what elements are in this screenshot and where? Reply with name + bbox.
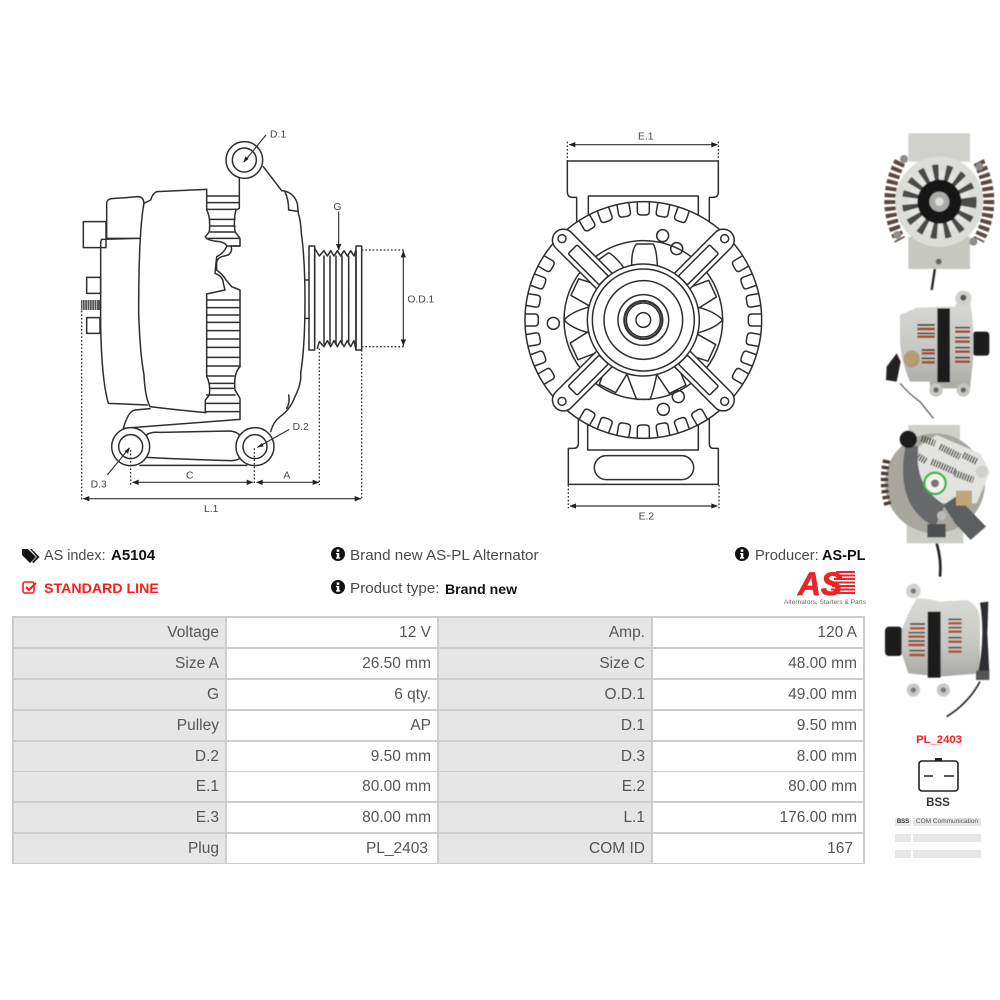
info row: producer: AS-PL (822, 548, 866, 564)
row: Plug / COM ID (14, 834, 863, 863)
icon: info (331, 580, 345, 594)
pin row: BSS: BSS (897, 819, 909, 825)
row: E.1 / E.2: E.2 (622, 778, 645, 795)
row: Pulley / D.1: Pulley (177, 717, 219, 734)
row: Plug / COM ID: PL_2403 (366, 840, 428, 857)
connector label BSS: BSS (926, 797, 950, 809)
row: E.3 / L.1 (14, 803, 863, 832)
info row: product type (331, 580, 518, 597)
side view technical drawing: D.3 (91, 479, 107, 490)
row: Size A / Size C: Size A (175, 655, 219, 672)
info row: AS index: A5104 (111, 547, 155, 564)
row: Pulley / D.1: 9.50 mm (797, 717, 857, 734)
icon: info (331, 547, 345, 561)
row: E.3 / L.1: L.1 (623, 809, 645, 826)
icon: checked box (22, 581, 37, 594)
row: Plug / COM ID: Plug (188, 840, 219, 857)
row: G / O.D.1: 6 qty. (394, 686, 431, 703)
row: G / O.D.1: O.D.1 (605, 686, 645, 703)
row: Pulley / D.1: D.1 (621, 717, 645, 734)
side view technical drawing: G (333, 202, 341, 213)
row: E.1 / E.2 (14, 772, 863, 801)
row: D.2 / D.3: D.2 (195, 748, 219, 765)
row: D.2 / D.3 (14, 742, 863, 771)
row: Voltage / Amp: 12 V (399, 624, 431, 641)
front view technical drawing: E.2 (639, 511, 654, 522)
row: Plug / COM ID: 167 (827, 840, 853, 857)
row: E.3 / L.1: 80.00 mm (362, 809, 431, 826)
specification table (12, 616, 865, 864)
pin table (895, 818, 981, 858)
row: E.3 / L.1: E.3 (196, 809, 219, 826)
pin row: empty (895, 850, 981, 858)
icon: info (735, 547, 749, 561)
row: D.2 / D.3: 8.00 mm (797, 748, 857, 765)
row: G / O.D.1: 49.00 mm (788, 686, 857, 703)
row: Size A / Size C: 26.50 mm (362, 655, 431, 672)
info row: product type: Product type: (350, 580, 440, 597)
row: Pulley / D.1 (14, 711, 863, 740)
row: Size A / Size C: 48.00 mm (788, 655, 857, 672)
AS logo: AS (797, 566, 843, 602)
info row: AS index (22, 547, 156, 564)
row: Voltage / Amp (14, 618, 863, 647)
row: G / O.D.1 (14, 680, 863, 709)
row: Plug / COM ID: COM ID (589, 840, 645, 857)
info row: brand new alternator: Brand new AS-PL Alternator (350, 547, 539, 564)
info row: producer: Producer: (755, 548, 819, 564)
side view technical drawing: D.1 (270, 129, 286, 140)
row: D.2 / D.3: 9.50 mm (371, 748, 431, 765)
info row: product type: Brand new (445, 581, 517, 597)
side view technical drawing: L.1 (204, 504, 219, 515)
side view technical drawing: D.2 (293, 422, 309, 433)
row: Voltage / Amp: Voltage (167, 624, 219, 641)
row: Voltage / Amp: Amp. (609, 624, 645, 641)
front view technical drawing: E.1 (638, 131, 654, 142)
pin row: empty (895, 834, 981, 842)
row: E.1 / E.2: 80.00 mm (362, 778, 431, 795)
row: Pulley / D.1: AP (410, 717, 431, 734)
icon: tags (22, 549, 40, 563)
info row: AS index: AS index: (44, 548, 106, 564)
pin row: BSS (895, 818, 981, 826)
plug label: PL_2403 (916, 734, 962, 746)
info row: standard line: STANDARD LINE (44, 581, 159, 597)
info row: producer (735, 547, 866, 564)
row: E.3 / L.1: 176.00 mm (779, 809, 857, 826)
side view technical drawing: O.D.1 (407, 295, 435, 306)
row: E.1 / E.2: 80.00 mm (788, 778, 857, 795)
side view technical drawing: C (186, 471, 194, 482)
row: Voltage / Amp: 120 A (817, 624, 857, 641)
row: D.2 / D.3: D.3 (621, 748, 645, 765)
row: Size A / Size C: Size C (599, 655, 645, 672)
side view technical drawing: A (283, 471, 290, 482)
AS logo: Alternators, Starters & Parts (784, 599, 867, 606)
row: E.1 / E.2: E.1 (196, 778, 219, 795)
row: Size A / Size C (14, 649, 863, 678)
pin row: BSS: COM Communication (916, 818, 978, 825)
row: G / O.D.1: G (207, 686, 219, 703)
